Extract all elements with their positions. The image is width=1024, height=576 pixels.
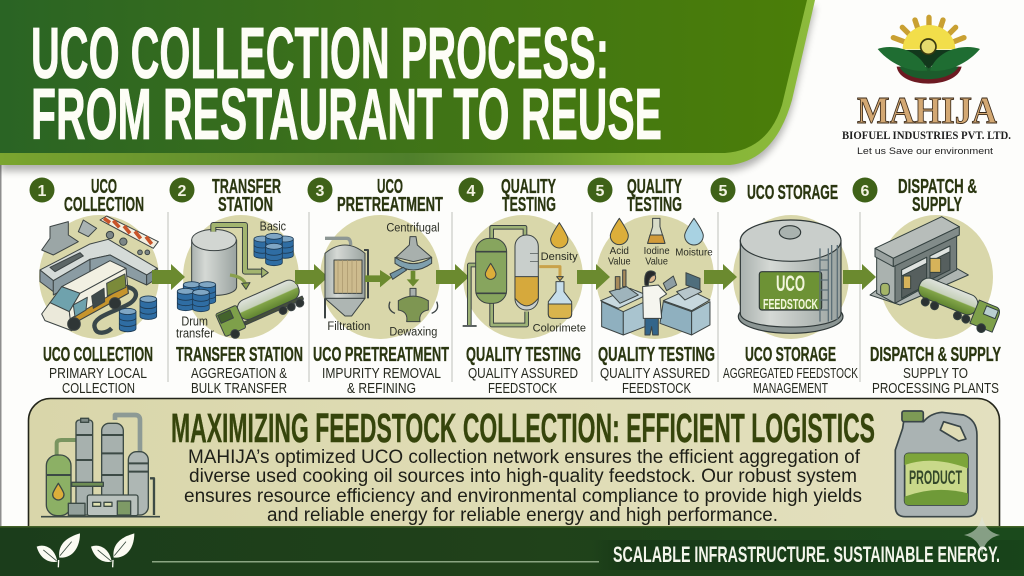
tank label: [763, 271, 818, 313]
banner body text: and reliable energy for reliable energy and high performance.: [267, 504, 778, 526]
heading 4: TESTING: [502, 194, 556, 216]
label 3: & REFINING: [347, 381, 416, 397]
label storage: UCO STORAGE: [745, 344, 836, 366]
icon: distillation vessels and flask: Colorimete: [533, 323, 586, 335]
panel: step 2 transfer station: [170, 176, 307, 397]
icon: distillation vessels and flask: [463, 223, 586, 335]
arrow storage to dispatch: [843, 264, 876, 290]
panel: step 3 UCO pretreatment: [308, 176, 449, 397]
label storage: AGGREGATED FEEDSTOCK: [723, 366, 858, 382]
badge 5: 5: [596, 183, 605, 200]
icon: sparkle: [964, 516, 1000, 554]
logo: Mahija Biofuel Industries: Let us Save our environment: [857, 146, 993, 157]
label 1: [43, 344, 153, 397]
footer bar: [0, 516, 1024, 576]
heading storage: UCO STORAGE: [747, 182, 838, 204]
badge 6: 6: [861, 183, 870, 200]
badge storage: [710, 178, 736, 202]
icon: tank, drums and tanker truck: Drum: [181, 314, 208, 328]
heading 6: SUPPLY: [912, 194, 962, 216]
label 5: FEEDSTOCK: [622, 381, 691, 397]
label 6: [870, 344, 1001, 397]
label 4: FEEDSTOCK: [488, 381, 557, 397]
badge storage: 5: [719, 183, 728, 200]
label 3: UCO PRETREATMENT: [313, 344, 449, 366]
icon: lab bench and scientist: Moisture: [675, 247, 713, 258]
icon: distillation vessels and flask: Density: [541, 251, 578, 263]
banner body text: diverse used cooking oil sources into high-quality feedstock. Our robust system: [189, 465, 857, 487]
label 2: [176, 344, 303, 397]
backdrop circles: [39, 215, 993, 339]
icon: lab bench and scientist: Value: [645, 257, 668, 268]
panel: UCO storage: [710, 178, 858, 397]
heading 5: TESTING: [627, 194, 682, 216]
heading 4: QUALITY: [501, 176, 556, 198]
label 1: COLLECTION: [62, 381, 135, 397]
badge 4: 4: [467, 183, 476, 200]
badge 4: [458, 178, 484, 202]
heading 4: [501, 176, 556, 216]
icon: lab bench and scientist: [601, 218, 713, 335]
badge 3: [308, 178, 332, 202]
label storage: [723, 344, 858, 397]
label 4: QUALITY ASSURED: [468, 366, 578, 382]
arrow 2 to 3: [295, 264, 328, 290]
label storage: MANAGEMENT: [753, 381, 828, 397]
icon: filtration, centrifuge and dewaxing: Filtration: [327, 319, 370, 333]
badge 1: 1: [38, 183, 47, 200]
heading 5: QUALITY: [627, 176, 682, 198]
arrow 5 to storage: [704, 264, 737, 290]
banner body text: [184, 446, 862, 526]
heading 1: UCO: [91, 176, 117, 198]
panel: step 5 quality testing lab: [588, 176, 715, 397]
banner body text: ensures resource efficiency and environmental compliance to provide high yields: [184, 485, 862, 507]
icon: leaf sprouts: [37, 533, 134, 567]
label 5: QUALITY ASSURED: [600, 366, 710, 382]
label 1: PRIMARY LOCAL: [49, 366, 147, 382]
banner body text: MAHIJA’s optimized UCO collection network ensures the efficient aggregation of: [188, 446, 861, 468]
icon: kitchen, van and drums: [40, 216, 158, 333]
logo: Mahija Biofuel Industries: BIOFUEL INDUSTRIES PVT. LTD.: [842, 130, 1011, 142]
arrow 4 to 5: [577, 264, 610, 290]
icon: lab bench and scientist: Iodine: [644, 246, 670, 257]
badge 2: 2: [178, 183, 187, 200]
icon: filtration, centrifuge and dewaxing: Centrifugal: [386, 221, 440, 235]
label 6: SUPPLY TO: [903, 366, 968, 382]
panel: step 1 UCO collection: [30, 176, 158, 397]
icon: warehouse and tanker truck: [870, 217, 1002, 337]
badge 5: [588, 178, 612, 202]
heading 3: PRETREATMENT: [337, 194, 443, 216]
header banner: [0, 0, 815, 171]
icon: tank, drums and tanker truck: Basic: [260, 220, 286, 234]
heading 3: UCO: [377, 176, 403, 198]
heading 2: [212, 176, 281, 216]
heading 1: COLLECTION: [64, 194, 144, 216]
icon: storage tank: [738, 220, 843, 333]
label 3: [313, 344, 449, 397]
heading 6: DISPATCH &: [898, 176, 977, 198]
label 2: AGGREGATION &: [191, 366, 287, 382]
badge 2: [170, 178, 194, 202]
logo: Mahija Biofuel Industries: [842, 17, 1011, 157]
panel: step 4 quality testing: [458, 176, 586, 397]
icon: tank, drums and tanker truck: [176, 220, 307, 342]
icon: lab bench and scientist: Acid: [610, 246, 629, 257]
footer line: [152, 561, 599, 562]
label 4: [466, 344, 581, 397]
heading 2: STATION: [218, 194, 273, 216]
tank label: FEEDSTOCK: [763, 296, 818, 313]
label 3: IMPURITY REMOVAL: [322, 366, 441, 382]
label 5: [598, 344, 715, 397]
heading 5: [627, 176, 682, 216]
label 1: UCO COLLECTION: [43, 344, 153, 366]
icon: filtration, centrifuge and dewaxing: [325, 221, 440, 339]
heading 3: [337, 176, 443, 216]
label 5: QUALITY TESTING: [598, 344, 715, 366]
badge 6: [852, 178, 878, 202]
badge 3: 3: [316, 183, 325, 200]
panel: feedstock banner: [28, 398, 1000, 558]
logo: Mahija Biofuel Industries: MAHIJA: [857, 90, 997, 132]
icon: product jug: [895, 411, 977, 517]
heading 1: [64, 176, 144, 216]
column dividers: [168, 212, 860, 382]
tank label: UCO: [776, 271, 805, 296]
arrow 3 to 4: [436, 264, 469, 290]
icon: refinery: [41, 415, 160, 517]
icon: tank, drums and tanker truck: transfer: [176, 326, 214, 340]
heading 2: TRANSFER: [212, 176, 281, 198]
label 4: QUALITY TESTING: [466, 344, 581, 366]
badge 1: [30, 178, 54, 202]
title: [31, 13, 662, 155]
icon: lab bench and scientist: Value: [608, 257, 631, 268]
panel: step 6 dispatch and supply: [852, 176, 1002, 397]
label 2: TRANSFER STATION: [176, 344, 303, 366]
arrow 1 to 2: [152, 264, 185, 290]
jug label: PRODUCT: [909, 468, 962, 489]
heading 6: [898, 176, 977, 216]
icon: filtration, centrifuge and dewaxing: Dewaxing: [389, 325, 437, 339]
label 2: BULK TRANSFER: [191, 381, 287, 397]
